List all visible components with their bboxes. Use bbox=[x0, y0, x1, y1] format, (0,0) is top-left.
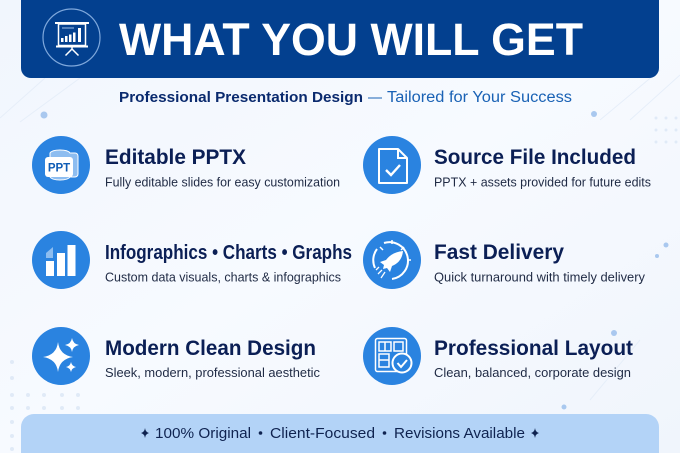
feature: Fast Delivery bbox=[363, 231, 646, 289]
heading: Infographics • Charts • Graphs bbox=[105, 242, 352, 264]
subtitle: Tailored for Your Success bbox=[387, 89, 572, 106]
subtitle bbox=[119, 89, 572, 106]
feature: Infographics bbox=[32, 231, 352, 289]
heading: Professional Layout bbox=[434, 337, 633, 360]
feature: Modern Clean Design bbox=[32, 327, 320, 385]
heading: Source File Included bbox=[434, 146, 636, 169]
description: Sleek, modern, professional aesthetic bbox=[105, 366, 320, 380]
title: WHAT YOU WILL GET bbox=[119, 14, 583, 65]
icon: presentation board bbox=[43, 9, 100, 66]
footer text bbox=[141, 426, 539, 442]
feature: Professional Layout bbox=[363, 327, 633, 385]
icon: PPT bbox=[32, 136, 90, 194]
icon: document check bbox=[363, 136, 421, 194]
subtitle: Professional Presentation Design bbox=[119, 89, 363, 106]
icon: speedometer rocket bbox=[363, 231, 421, 289]
icon: layout check bbox=[363, 327, 421, 385]
description: Clean, balanced, corporate design bbox=[434, 366, 631, 380]
heading: Modern Clean Design bbox=[105, 337, 316, 360]
description: Fully editable slides for easy customization bbox=[105, 176, 340, 190]
footer text: 100% Original bbox=[155, 426, 251, 442]
footer text: Revisions Available bbox=[394, 426, 525, 442]
header banner bbox=[21, 0, 659, 78]
footer text: Client-Focused bbox=[270, 426, 375, 442]
description: Quick turnaround with timely delivery bbox=[434, 270, 646, 284]
icon: bar chart bbox=[32, 231, 90, 289]
heading: Editable PPTX bbox=[105, 146, 246, 169]
heading: Fast Delivery bbox=[434, 241, 564, 264]
feature: Editable PPTX bbox=[32, 136, 340, 194]
icon: PPT: PPT bbox=[48, 162, 70, 174]
subtitle: — bbox=[368, 89, 382, 106]
feature: Source File Included bbox=[363, 136, 651, 194]
description: PPTX + assets provided for future edits bbox=[434, 176, 651, 190]
description: Custom data visuals, charts & infographics bbox=[105, 270, 341, 284]
footer bar bbox=[21, 414, 659, 453]
icon: sparkles bbox=[32, 327, 90, 385]
